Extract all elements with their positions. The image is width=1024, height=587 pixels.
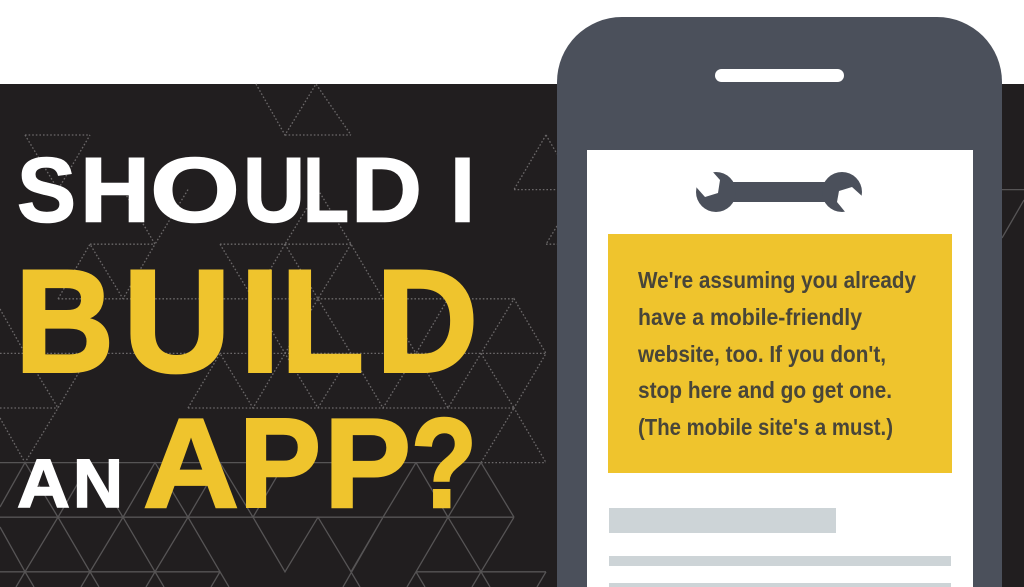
phone speaker [715,69,844,82]
title line: APP?: P [239,392,321,534]
title line: AN: N [73,445,123,522]
icon: wrench [692,168,866,216]
title line: SHOULD I: S [17,140,76,242]
title line: AN: A [17,445,70,522]
title line: BUILD: U [123,240,231,402]
callout text: have a mobile-friendly [638,304,862,330]
title line: APP?: P [324,392,411,534]
title line: BUILD: L [281,240,364,402]
callout: yellow note [608,234,952,473]
title line: SHOULD I: O [150,140,240,242]
callout text: stop here and go get one. [638,377,892,403]
callout text: (The mobile site's a must.) [638,414,893,440]
callout text [637,267,916,440]
phone screen [587,150,973,587]
title line: BUILD: I [240,240,280,402]
title line: APP?: ? [411,392,477,534]
dotted triangle pattern [0,84,557,463]
phone body [557,17,1002,587]
solid triangle pattern [0,190,1024,587]
title [15,140,478,534]
title line: SHOULD I: U [243,140,305,242]
title line: SHOULD I: H [80,140,150,242]
title line: SHOULD I: I [450,140,475,242]
title line: APP?: A [143,392,239,534]
title line: BUILD: B [15,240,114,402]
title line: BUILD: D [376,240,478,402]
callout text: website, too. If you don't, [637,341,886,367]
callout text: We're assuming you already [638,267,916,293]
placeholder content bars [609,508,951,587]
title line: SHOULD I: D [351,140,422,242]
title line: SHOULD I: L [303,140,349,242]
phone [557,17,1002,587]
